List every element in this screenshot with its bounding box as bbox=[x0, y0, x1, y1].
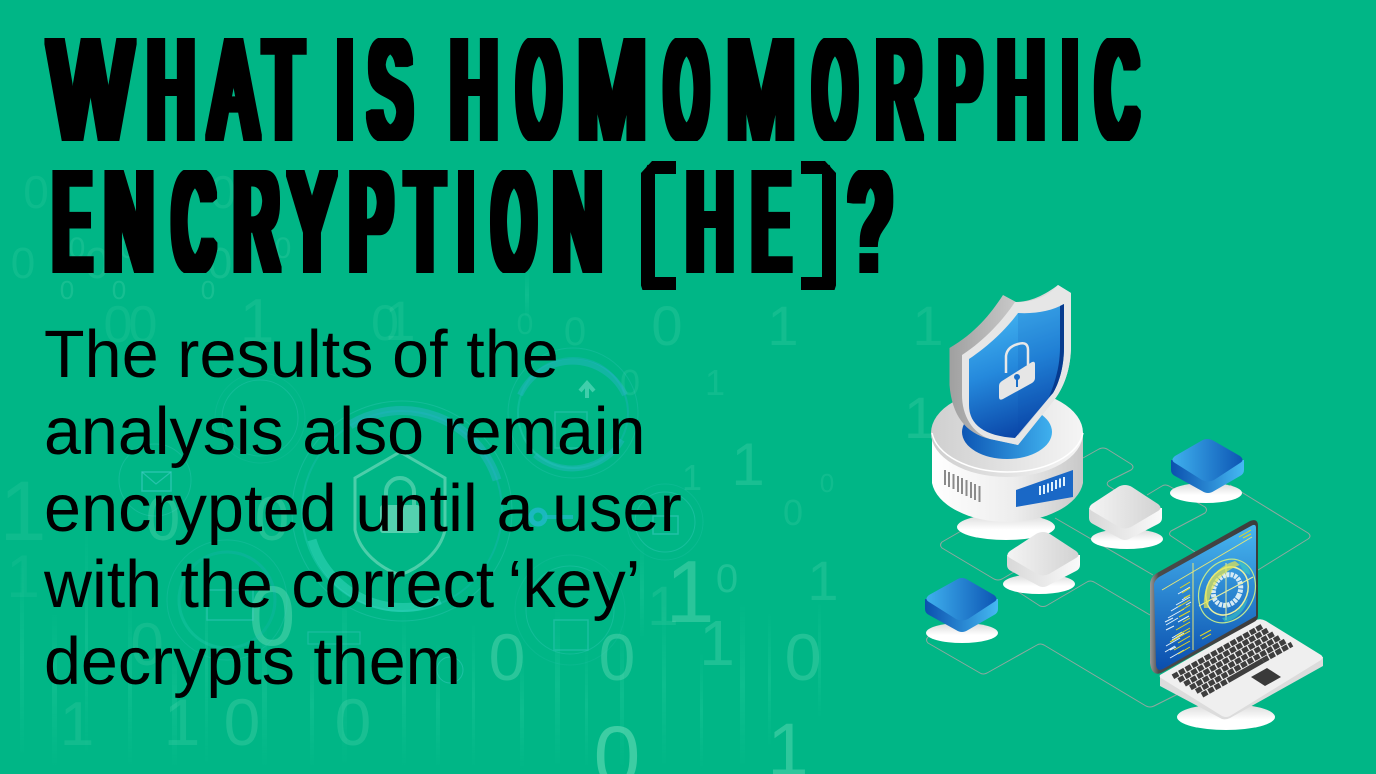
icon: blue node lower left bbox=[925, 578, 998, 643]
laptop screen bbox=[1150, 520, 1266, 674]
circuit lines bbox=[926, 448, 1310, 707]
vents bbox=[944, 470, 980, 502]
title: ( bbox=[636, 142, 660, 300]
background: binary code and faint security icons: 1 bbox=[904, 386, 936, 451]
body text: The results of the bbox=[44, 318, 559, 392]
background: binary code and faint security icons: 1 bbox=[384, 289, 416, 352]
background: binary code and faint security icons: 0 bbox=[224, 685, 260, 759]
background: binary code and faint security icons: 0 bbox=[208, 239, 232, 288]
title: C bbox=[1097, 10, 1137, 168]
title: H bbox=[998, 10, 1044, 168]
icon: white node upper bbox=[1089, 485, 1163, 549]
background: binary code and faint security icons: 0 bbox=[335, 685, 371, 759]
background: binary code and faint security icons: 0 bbox=[129, 296, 157, 354]
keyboard bbox=[1173, 626, 1292, 695]
title: N bbox=[554, 142, 602, 300]
background: binary code and faint security icons: 1 bbox=[699, 607, 735, 679]
background: binary code and faint security icons: 0 bbox=[651, 294, 683, 357]
background: binary code and faint security icons: 1 bbox=[666, 542, 714, 641]
title: T bbox=[407, 142, 443, 300]
trackpad bbox=[1251, 668, 1281, 686]
background: binary code and faint security icons: 0 bbox=[783, 492, 803, 533]
title: P bbox=[350, 142, 392, 300]
title: A bbox=[211, 10, 256, 168]
background: binary code and faint security icons: 1 bbox=[705, 362, 725, 403]
background: binary code and faint security icons: 1 bbox=[912, 294, 944, 357]
body text: encrypted until a user bbox=[44, 472, 682, 546]
background: binary code and faint security icons: 1 bbox=[240, 287, 274, 356]
background: binary code and faint security icons: 0 bbox=[85, 239, 109, 288]
background: binary code and faint security icons: 1 bbox=[807, 549, 839, 612]
title: O bbox=[814, 10, 856, 168]
title: O bbox=[518, 10, 560, 168]
background: binary code and faint security icons: 0 bbox=[599, 620, 635, 694]
padlock bbox=[999, 343, 1035, 400]
background: binary code and faint security icons: 1 bbox=[164, 685, 200, 759]
background: binary code and faint security icons: 0 bbox=[11, 239, 35, 288]
title: M bbox=[727, 10, 795, 168]
background: binary code and faint security icons: 1 bbox=[767, 294, 799, 357]
title: R bbox=[234, 142, 278, 300]
background: binary code and faint security icons: 0 bbox=[60, 275, 74, 305]
background: binary code and faint security icons: 0 bbox=[104, 296, 132, 354]
title: ) bbox=[817, 142, 841, 300]
icon: shield on cylinder base bbox=[931, 285, 1083, 540]
title: H bbox=[687, 142, 733, 300]
background: binary code and faint security icons: 0 bbox=[820, 468, 834, 498]
title: E bbox=[54, 142, 90, 300]
title: E bbox=[753, 142, 789, 300]
background: binary code and faint security icons: 0 bbox=[275, 232, 291, 265]
body text: decrypts them bbox=[44, 625, 461, 699]
background: binary code and faint security icons: 0 bbox=[23, 166, 49, 218]
title: M bbox=[578, 10, 646, 168]
title: T bbox=[265, 10, 301, 168]
background: binary code and faint security icons: 1 bbox=[682, 457, 702, 498]
body text: with the correct ‘key’ bbox=[44, 548, 640, 622]
title: O bbox=[494, 142, 534, 300]
title: C bbox=[174, 142, 214, 300]
background: binary code and faint security icons: 1 bbox=[6, 543, 40, 610]
background: binary code and faint security icons: 1 bbox=[731, 431, 765, 498]
icon: white node lower bbox=[1003, 532, 1080, 594]
background: binary code and faint security icons: 0 bbox=[564, 310, 586, 354]
background: binary code and faint security icons: 0 bbox=[201, 275, 215, 305]
background: binary code and faint security icons: 0 bbox=[249, 569, 295, 663]
background: binary code and faint security icons: 1 bbox=[60, 690, 94, 759]
laptop base bbox=[1160, 619, 1323, 719]
title: P bbox=[939, 10, 981, 168]
icon: blue node upper right bbox=[1170, 439, 1244, 503]
status panel bbox=[1016, 470, 1073, 507]
title: O bbox=[666, 10, 707, 168]
title: R bbox=[877, 10, 921, 168]
icon: laptop bbox=[1150, 520, 1323, 730]
title: S bbox=[369, 10, 411, 168]
title: W bbox=[50, 10, 131, 168]
title: N bbox=[105, 142, 153, 300]
background: binary code and faint security icons: 0 bbox=[146, 485, 180, 554]
body text bbox=[44, 318, 682, 699]
background: binary code and faint security icons: 0 bbox=[112, 275, 126, 305]
background: binary code and faint security icons: 0 bbox=[255, 485, 289, 554]
title: H bbox=[451, 10, 497, 168]
title: I bbox=[460, 142, 472, 300]
title: I bbox=[339, 10, 351, 168]
background: binary code and faint security icons: 0 bbox=[120, 232, 136, 265]
title bbox=[44, 38, 1141, 290]
background: binary code and faint security icons: 1 bbox=[647, 574, 679, 637]
background: binary code and faint security icons: 0 bbox=[620, 362, 640, 403]
background: binary code and faint security icons: 0 bbox=[130, 611, 164, 678]
background: binary code and faint security icons: 0 bbox=[785, 620, 821, 694]
title: I bbox=[1064, 10, 1076, 168]
background: binary code and faint security icons: 0 bbox=[210, 166, 236, 218]
shield bbox=[950, 285, 1071, 445]
body text: analysis also remain bbox=[44, 395, 645, 469]
background: binary code and faint security icons: 0 bbox=[489, 620, 525, 694]
screen code lines bbox=[1165, 530, 1251, 658]
title: Y bbox=[290, 142, 334, 300]
background: binary code and faint security icons: 1 bbox=[0, 464, 46, 558]
background: binary code and faint security icons: 0 bbox=[69, 232, 85, 265]
background: binary code and faint security icons: 0 bbox=[517, 308, 533, 341]
title: ? bbox=[850, 142, 890, 300]
background: binary code and faint security icons: 0 bbox=[716, 557, 738, 601]
title: H bbox=[148, 10, 194, 168]
background: binary code and faint security icons: 0 bbox=[371, 295, 399, 351]
